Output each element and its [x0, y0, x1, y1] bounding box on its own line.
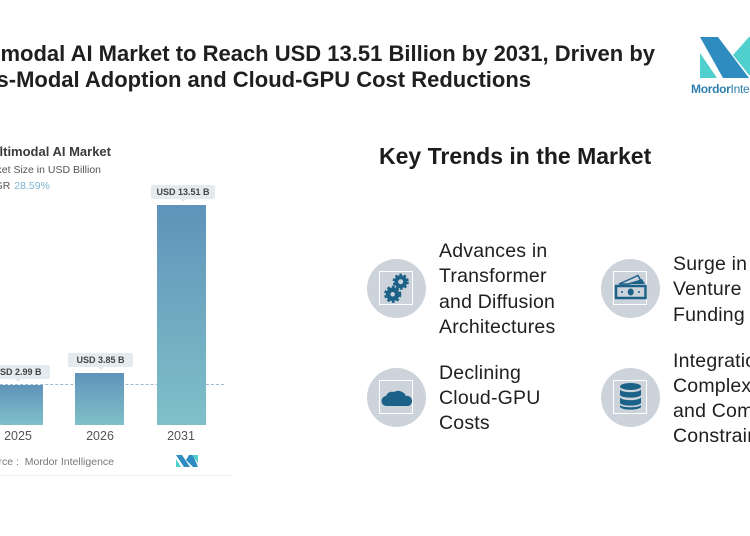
icon: database: [601, 368, 660, 427]
value label 2026: USD 3.85 B: [76, 355, 125, 365]
trend: venture funding: [601, 253, 747, 326]
year 2025: 2025: [4, 429, 32, 443]
dashed reference line: [0, 384, 224, 385]
label: and Diffusion: [439, 291, 555, 313]
trend: integration complexity: [601, 350, 750, 447]
trend: transformer and diffusion: [367, 240, 555, 338]
label: [439, 240, 555, 338]
label: [673, 350, 750, 447]
value label 2025: [0, 365, 50, 379]
value label 2026: [68, 353, 133, 367]
icon: cloud: [367, 368, 426, 427]
chart baseline: [0, 475, 232, 476]
label: Funding: [673, 304, 745, 326]
value label 2031: [151, 185, 215, 199]
icon: banknotes: [601, 259, 660, 318]
bar 2031: [157, 205, 206, 425]
label: Costs: [439, 412, 490, 434]
logo: Mordor Intelligence: [691, 37, 750, 96]
label: Transformer: [439, 265, 547, 287]
trend: cloud GPU costs: [367, 362, 540, 434]
year 2031: 2031: [167, 429, 195, 443]
label: [673, 253, 747, 326]
label: Venture: [673, 278, 742, 300]
title: [0, 40, 655, 92]
label: Declining: [439, 362, 521, 384]
heading: key trends: Key Trends in the Market: [379, 143, 651, 169]
label: Architectures: [439, 316, 555, 338]
label: Advances in: [439, 240, 547, 262]
label: [439, 362, 540, 434]
chart logo: [176, 455, 198, 467]
value label 2031: USD 13.51 B: [156, 187, 210, 197]
label: Cloud-GPU: [439, 387, 540, 409]
bar 2025: [0, 385, 43, 425]
panel: bar chart: [0, 144, 232, 476]
year 2026: 2026: [86, 429, 114, 443]
icon: gears: [367, 259, 426, 318]
label: Surge in: [673, 253, 747, 275]
bar 2026: [75, 373, 124, 425]
